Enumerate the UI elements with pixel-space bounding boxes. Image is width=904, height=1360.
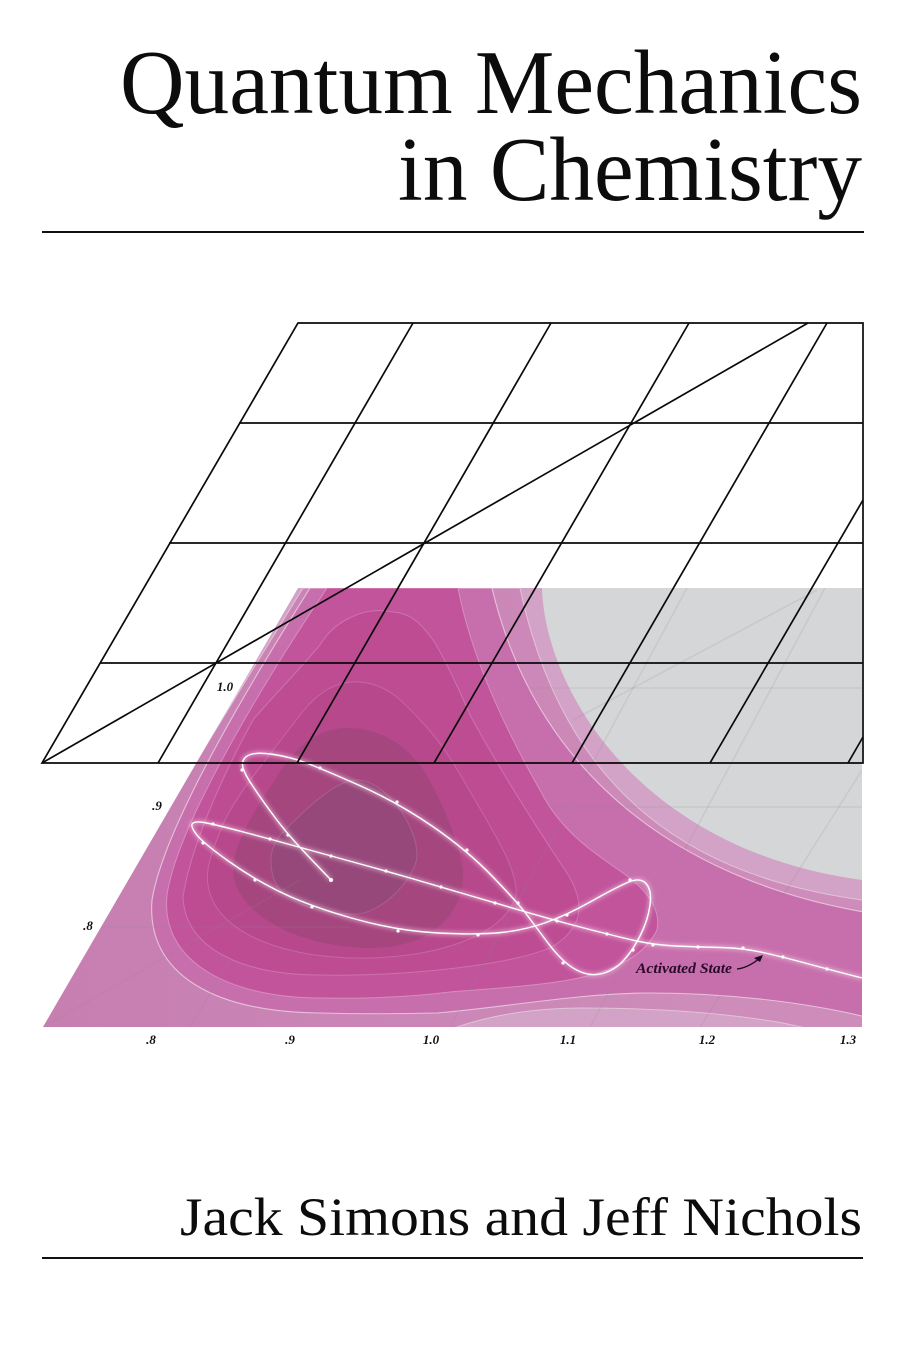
axis labels (83, 679, 857, 1047)
top rule (42, 231, 864, 233)
axis labels: 1.3 (840, 1032, 857, 1047)
axis labels: 1.2 (699, 1032, 716, 1047)
axis labels: .9 (152, 798, 162, 813)
title (120, 32, 862, 220)
faint grid shadow (40, 588, 862, 1027)
axis labels: .9 (285, 1032, 295, 1047)
activated state callout (635, 955, 763, 977)
perspective grid (42, 323, 863, 763)
axis labels: 1.1 (560, 1032, 576, 1047)
axis labels: .8 (83, 918, 93, 933)
trajectory glow (192, 753, 862, 978)
axis labels: 1.0 (217, 679, 234, 694)
trajectory time-step dots (201, 766, 829, 971)
axis labels: .8 (146, 1032, 156, 1047)
title: Quantum Mechanics (120, 32, 862, 133)
contour plot: potential energy surface (30, 585, 870, 1042)
title: in Chemistry (398, 119, 862, 220)
authors: Jack Simons and Jeff Nichols (180, 1187, 862, 1247)
axis labels: 1.0 (423, 1032, 440, 1047)
trajectory line (192, 753, 862, 978)
activated state callout: Activated State (635, 961, 732, 977)
bottom rule (42, 1257, 863, 1259)
